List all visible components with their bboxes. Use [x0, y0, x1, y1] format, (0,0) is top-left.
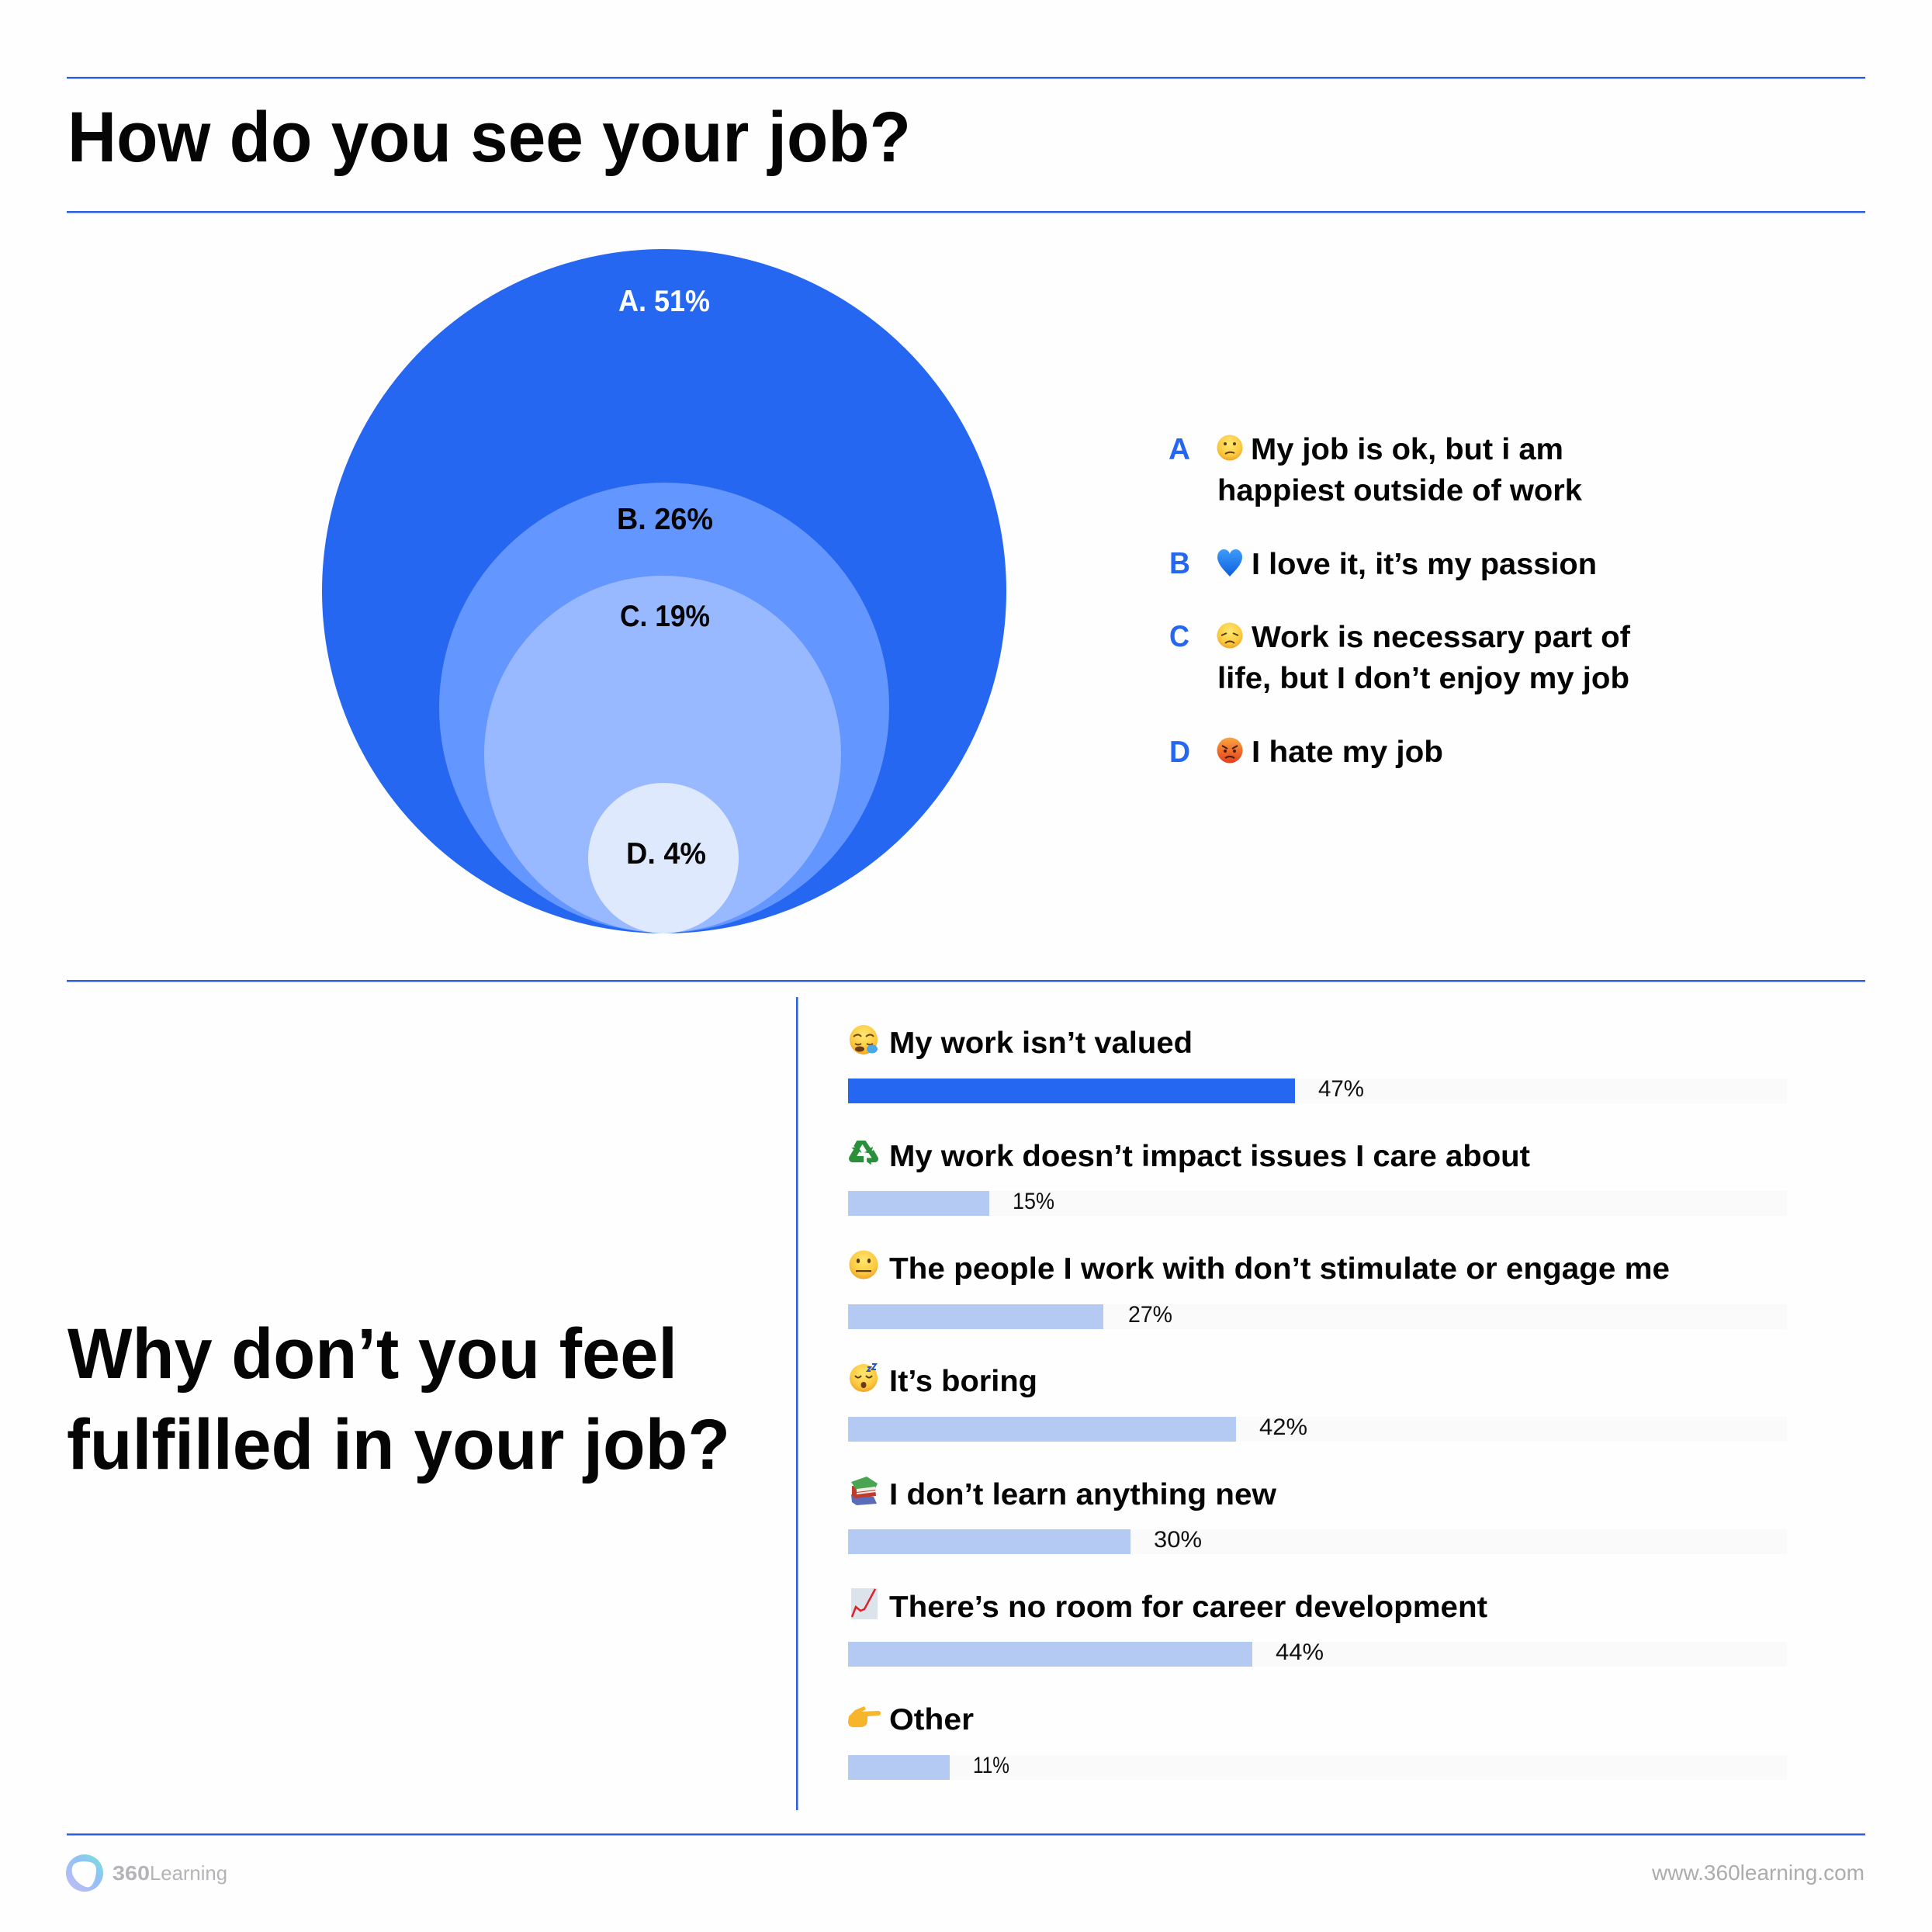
row: I don't learn anything new — [848, 1477, 1787, 1554]
icon: sleeping face — [850, 1364, 878, 1392]
footer logo: 360Learning — [66, 1854, 227, 1892]
legend item D: D — [1169, 736, 1190, 769]
label A: A. 51% — [618, 285, 710, 318]
circle D 4% — [588, 783, 739, 933]
row: my work doesn't impact issues — [848, 1140, 1787, 1216]
icon: pointing hand — [848, 1706, 881, 1727]
legend item C: life, but I don’t enjoy my job — [1217, 662, 1629, 695]
footer logo: 360Learning: 360 — [113, 1861, 150, 1885]
legend item C: C — [1169, 620, 1189, 653]
circle A 51% — [322, 249, 1006, 933]
row: no room for career development: 44% — [1276, 1639, 1324, 1665]
row: my work doesn't impact issues: 15% — [1013, 1189, 1054, 1214]
icon: stack of books — [851, 1477, 878, 1505]
icon: confused face — [1217, 435, 1243, 461]
legend item D — [1169, 736, 1443, 769]
circle B 26% — [439, 483, 889, 933]
icon: recycling symbol — [849, 1141, 878, 1165]
row: other: 11% — [973, 1753, 1009, 1778]
row: other — [848, 1703, 1787, 1780]
icon: sleepy face — [850, 1025, 878, 1054]
legend — [1169, 433, 1631, 769]
row: other: Other — [889, 1703, 974, 1736]
bar chart: reasons — [848, 1025, 1787, 1780]
legend item A — [1169, 433, 1582, 507]
footer logo: 360Learning: Learning — [150, 1861, 227, 1885]
title: How do you see your job?: How do you see your job? — [68, 98, 911, 177]
row: it's boring: 42% — [1259, 1414, 1307, 1440]
legend item B: B — [1169, 547, 1190, 580]
icon: disappointed face — [1217, 622, 1243, 649]
row: the people I work with: 27% — [1128, 1302, 1172, 1328]
heading: Why don't you feel fulfilled in your job?: Why don’t you feel — [68, 1314, 677, 1394]
legend item A: My job is ok, but i am — [1251, 433, 1563, 466]
row: the people I work with: The people I work with don’t stimulate or engage me — [889, 1252, 1670, 1286]
row: I don't learn anything new: I don’t learn anything new — [889, 1478, 1277, 1511]
row: no room for career development — [848, 1588, 1787, 1667]
icon: angry face — [1217, 737, 1243, 763]
legend item D: I hate my job — [1252, 736, 1443, 769]
icon: chart increasing — [851, 1588, 878, 1619]
circle C 19% — [484, 576, 841, 933]
row: it's boring — [848, 1364, 1787, 1442]
legend item B: I love it, it’s my passion — [1252, 548, 1597, 581]
row: it's boring: It’s boring — [889, 1365, 1037, 1398]
row: my work isn't valued: My work isn’t valued — [889, 1027, 1193, 1060]
heading: Why don't you feel fulfilled in your job? — [67, 1314, 730, 1484]
label B: B. 26% — [617, 503, 713, 536]
legend item A: A — [1169, 433, 1190, 466]
legend item C — [1169, 620, 1631, 695]
footer url: www.360learning.com — [1651, 1861, 1864, 1885]
heading: Why don't you feel fulfilled in your job?: fulfilled in your job? — [67, 1405, 730, 1484]
legend item C: Work is necessary part of — [1252, 621, 1631, 654]
label C: C. 19% — [620, 600, 710, 633]
row: I don't learn anything new: 30% — [1154, 1527, 1202, 1553]
nested circle chart — [322, 249, 1006, 933]
legend item A: happiest outside of work — [1217, 474, 1582, 507]
row: my work isn't valued — [848, 1025, 1787, 1103]
row: the people I work with — [848, 1251, 1787, 1329]
icon: logo ring — [66, 1854, 103, 1892]
row: my work isn't valued: 47% — [1318, 1076, 1364, 1102]
icon: neutral face — [849, 1251, 878, 1279]
row: no room for career development: There’s no room for career development — [889, 1591, 1487, 1624]
row: my work doesn't impact issues: My work doesn’t impact issues I care about — [889, 1140, 1530, 1173]
icon: blue heart — [1217, 549, 1242, 576]
label D: D. 4% — [626, 837, 706, 871]
